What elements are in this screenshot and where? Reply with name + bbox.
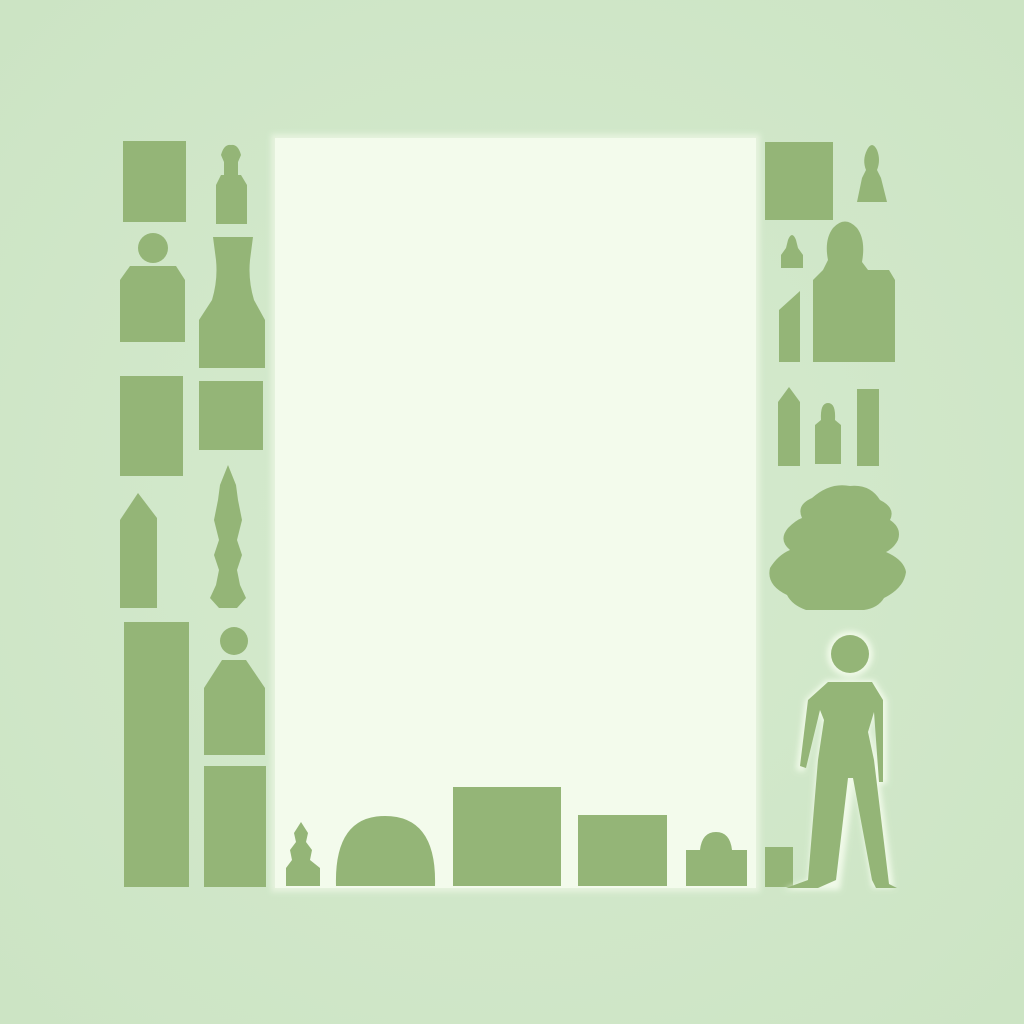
left column silhouettes [120, 141, 266, 887]
panel: central blank board [271, 134, 760, 892]
right column silhouettes [765, 142, 906, 887]
figure: standing person with glow [783, 631, 897, 890]
bottom row objects [286, 787, 747, 886]
